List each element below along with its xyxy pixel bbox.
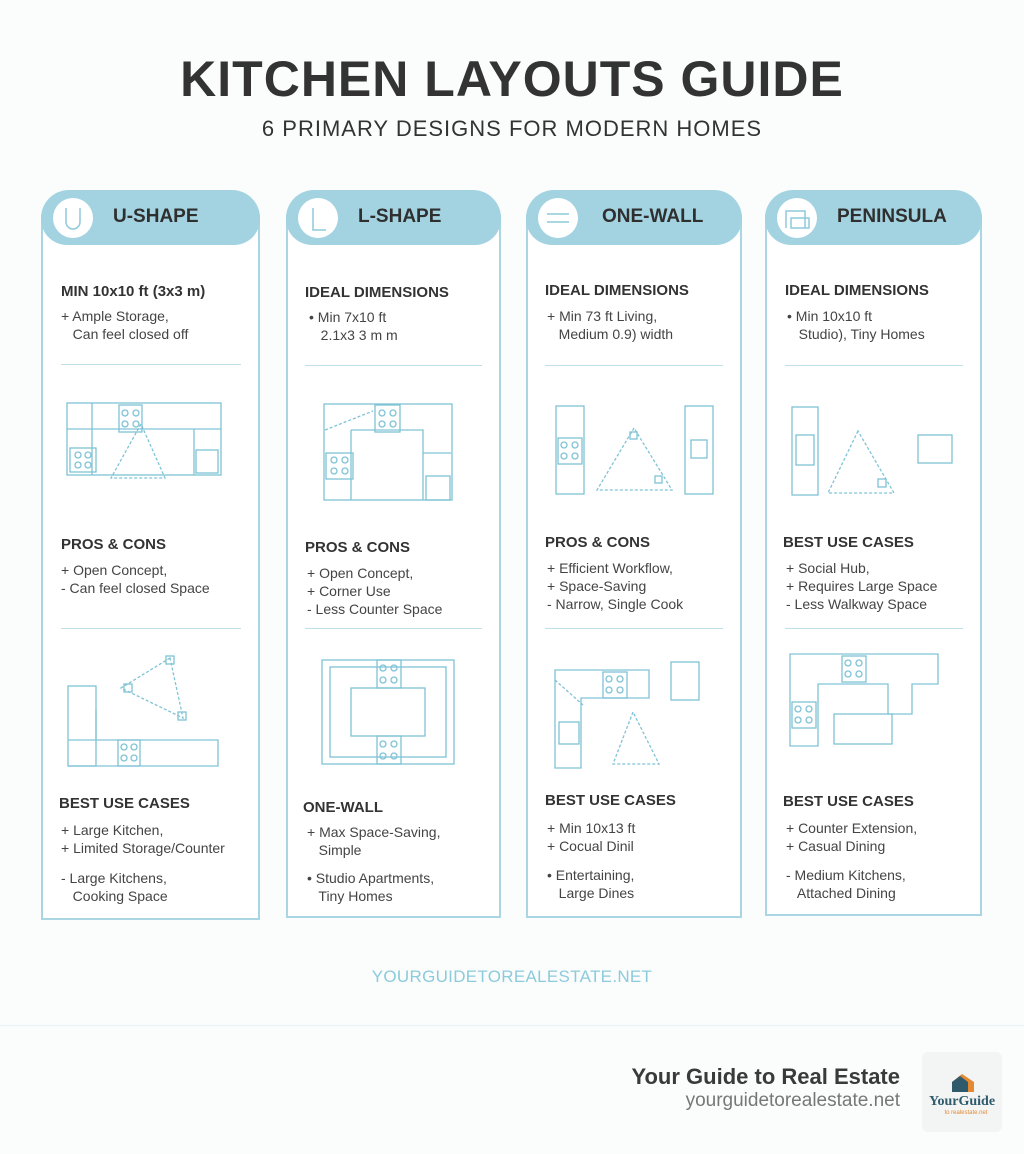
heading: u pros: PROS & CONS [61, 536, 166, 553]
heading: one-wall best use: BEST USE CASES [545, 792, 676, 809]
text: peninsula dims: • Min 10x10 ft Studio), Tiny Homes [787, 308, 925, 342]
header: u-shape: U-SHAPE [113, 206, 199, 227]
heading: l one-wall: ONE-WALL [303, 799, 383, 816]
header: l-shape [286, 190, 501, 245]
diagram: l plan 1 [323, 403, 453, 501]
text: u dims: + Ample Storage, Can feel closed off [61, 308, 188, 342]
header: peninsula: PENINSULA [837, 206, 947, 227]
heading: peninsula best use 2: BEST USE CASES [783, 793, 914, 810]
text: l pros: + Open Concept, + Corner Use - Less Counter Space [307, 565, 442, 617]
footer brand [631, 1064, 900, 1111]
diagram: peninsula plan 2 [789, 653, 939, 747]
diagram: l plan 2 [321, 659, 455, 765]
logo [922, 1052, 1002, 1132]
header: one-wall [526, 190, 742, 245]
text: one-wall dims: + Min 73 ft Living, Medium 0.9) width [547, 308, 673, 342]
heading: u dims: MIN 10x10 ft (3x3 m) [61, 283, 205, 300]
title: KITCHEN LAYOUTS GUIDE [180, 51, 844, 107]
heading: l dims: IDEAL DIMENSIONS [305, 284, 449, 301]
header: l-shape: L-SHAPE [358, 206, 441, 227]
text: l one-wall 2: • Studio Apartments, Tiny Homes [307, 870, 434, 904]
text: one-wall best use 2: • Entertaining, Large Dines [547, 867, 634, 901]
logo: YourGuide [929, 1094, 995, 1109]
logo: to realestate.net [944, 1110, 988, 1116]
text: one-wall pros: + Efficient Workflow, + Space-Saving - Narrow, Single Cook [547, 560, 683, 612]
panel: l-shape [286, 215, 501, 918]
heading: l pros: PROS & CONS [305, 539, 410, 556]
panel: u-shape [41, 215, 260, 920]
text: l dims: • Min 7x10 ft 2.1x3 3 m m [309, 309, 398, 343]
heading: u best use: BEST USE CASES [59, 795, 190, 812]
diagram: one-wall plan 1 [555, 405, 714, 495]
diagram: peninsula plan 1 [791, 406, 953, 496]
heading: one-wall dims: IDEAL DIMENSIONS [545, 282, 689, 299]
footer brand: yourguidetorealestate.net [686, 1090, 900, 1111]
text: u pros: + Open Concept, - Can feel closed Space [61, 562, 210, 596]
footer url: YOURGUIDETOREALESTATE.NET [372, 967, 652, 986]
text: u best use 2: - Large Kitchens, Cooking Space [61, 870, 168, 904]
footer brand: Your Guide to Real Estate [631, 1064, 900, 1089]
panel: one-wall [526, 215, 742, 918]
header: u-shape [41, 190, 260, 245]
subtitle: 6 PRIMARY DESIGNS FOR MODERN HOMES [262, 116, 762, 141]
header: peninsula [765, 190, 982, 245]
heading: peninsula best use: BEST USE CASES [783, 534, 914, 551]
heading: one-wall pros: PROS & CONS [545, 534, 650, 551]
diagram: u plan 1 [66, 402, 222, 479]
text: peninsula best use 2: + Counter Extension, + Casual Dining [786, 820, 917, 854]
diagram: one-wall plan 2 [554, 661, 700, 769]
diagram: u plan 2 [67, 655, 219, 767]
text: l one-wall: + Max Space-Saving, Simple [307, 824, 440, 858]
text: peninsula best use 3: - Medium Kitchens, Attached Dining [786, 867, 906, 901]
heading: peninsula dims: IDEAL DIMENSIONS [785, 282, 929, 299]
text: u best use: + Large Kitchen, + Limited Storage/Counter [61, 822, 225, 856]
panel: peninsula [765, 215, 982, 916]
text: peninsula best use: + Social Hub, + Requires Large Space - Less Walkway Space [786, 560, 937, 612]
text: one-wall best use: + Min 10x13 ft + Cocual Dinil [547, 820, 635, 854]
header: one-wall: ONE-WALL [602, 206, 703, 227]
